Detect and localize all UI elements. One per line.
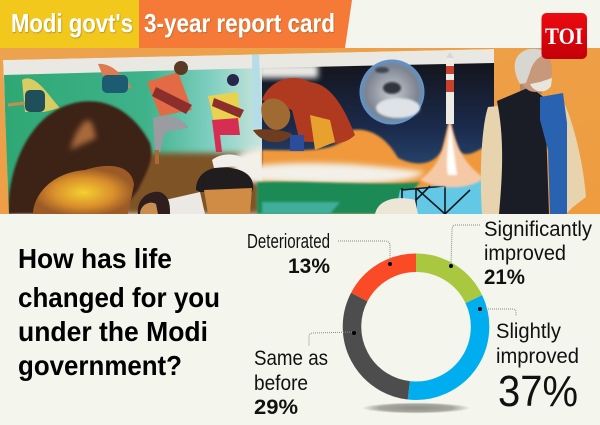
white paint patch	[228, 146, 262, 186]
label: deteriorated: Deteriorated	[247, 231, 330, 253]
woman drinking with red headscarf	[253, 78, 355, 151]
small girl	[138, 192, 170, 214]
label: slightly improved: improved	[496, 345, 579, 368]
Narendra Modi photograph	[481, 48, 586, 214]
crouching farm woman	[8, 78, 60, 112]
label: slightly improved: Slightly	[496, 320, 561, 343]
large woman's face	[33, 166, 134, 214]
falling water stream	[252, 53, 262, 128]
rocket flame	[420, 122, 484, 187]
header orange tab	[139, 0, 352, 48]
photo: mural and prime minister	[0, 48, 600, 214]
label: deteriorated: 13%	[288, 255, 330, 278]
drummer two	[208, 74, 244, 152]
second farm woman	[98, 64, 132, 93]
header band	[0, 0, 352, 48]
segment: same as before	[352, 297, 409, 390]
drummer one	[147, 61, 192, 164]
green field panel	[4, 68, 262, 214]
rocket	[446, 52, 454, 124]
label: deteriorated	[247, 231, 330, 278]
neck	[520, 84, 542, 94]
header yellow tab	[0, 0, 139, 48]
orange saffron splash	[262, 122, 494, 214]
segment: significantly improved	[416, 263, 474, 299]
donut chart	[352, 263, 480, 391]
white band	[240, 163, 425, 184]
label: same as before	[254, 347, 328, 419]
label: significantly improved: improved	[484, 242, 566, 265]
TOI logo: TOI	[545, 24, 583, 49]
header title part two: 3-year report card	[144, 8, 335, 38]
label: same as before: 29%	[254, 396, 298, 419]
white hair	[514, 48, 542, 84]
nurse	[165, 154, 253, 214]
stretcher patch	[375, 198, 418, 214]
label: significantly improved	[484, 218, 592, 289]
TOI logo	[542, 13, 587, 59]
moon	[360, 60, 424, 124]
question heading: government?	[18, 350, 182, 381]
question heading: How has life	[18, 243, 172, 274]
night sky panel	[262, 63, 494, 170]
question heading: under the Modi	[18, 316, 208, 347]
large woman's hair	[8, 101, 151, 214]
label: slightly improved: 37%	[498, 367, 578, 416]
brown ground	[125, 153, 260, 214]
label: significantly improved: Significantly	[484, 218, 592, 241]
green band	[257, 182, 420, 214]
question heading: changed for you	[18, 282, 220, 313]
face	[522, 48, 552, 92]
blue jacket panel	[540, 93, 567, 214]
black jacket	[497, 87, 549, 214]
kurta	[481, 95, 586, 214]
label: same as before: Same as	[254, 347, 328, 370]
leader lines	[309, 225, 516, 346]
mural wall painting	[3, 49, 494, 214]
header title part one: Modi govt's	[11, 8, 133, 38]
leader dots	[352, 262, 482, 335]
segment: deteriorated	[359, 263, 416, 297]
beard	[530, 78, 552, 91]
label: same as before: before	[254, 372, 308, 395]
label: significantly improved: 21%	[484, 266, 525, 289]
donut shadow	[362, 402, 470, 414]
segment: slightly improved	[409, 299, 480, 391]
launch tower	[398, 179, 482, 214]
question heading	[18, 243, 220, 381]
label: slightly improved	[496, 320, 579, 416]
